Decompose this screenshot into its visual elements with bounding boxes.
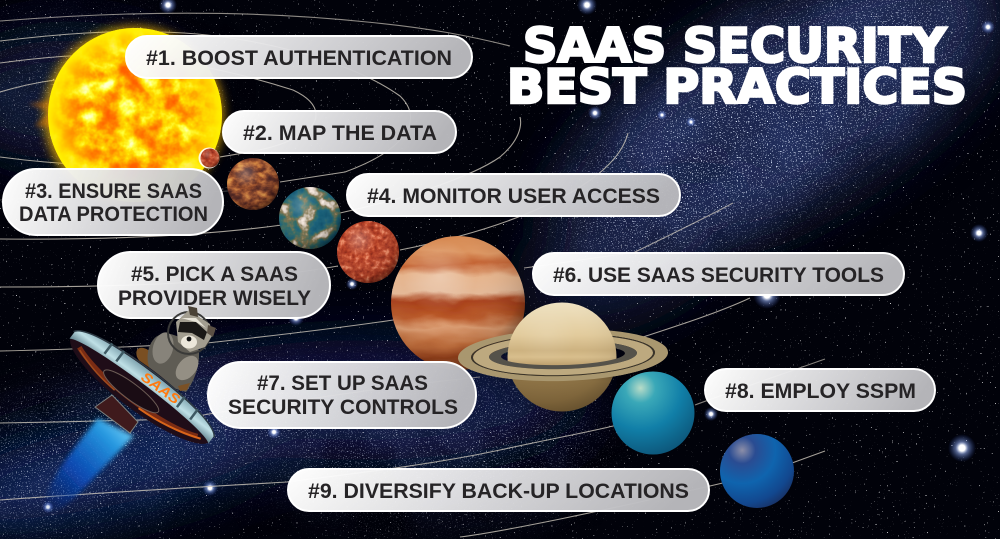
title — [507, 19, 967, 115]
icon: Venus — [227, 158, 279, 210]
icon: Saturn with rings — [457, 302, 669, 412]
rocket flame — [44, 418, 134, 513]
pill #4 — [347, 174, 680, 216]
icon: Earth — [279, 187, 341, 249]
title: BEST PRACTICES — [507, 60, 967, 115]
pill #7: SECURITY CONTROLS — [228, 395, 458, 419]
pill #7: #7. SET UP SAAS — [257, 371, 428, 395]
pill #5: #5. PICK A SAAS — [131, 262, 298, 286]
pill #7 — [208, 362, 476, 428]
pill #3: #3. ENSURE SAAS — [25, 179, 202, 203]
pill #3 — [3, 169, 223, 235]
pill #1 — [126, 36, 472, 78]
saucer hull — [57, 318, 224, 459]
pill #4: #4. MONITOR USER ACCESS — [367, 184, 660, 208]
title: SAAS SECURITY — [523, 19, 947, 74]
icon: Jupiter — [391, 236, 525, 370]
pill #8 — [705, 369, 935, 411]
pill #6: #6. USE SAAS SECURITY TOOLS — [553, 263, 884, 287]
pill #5: PROVIDER WISELY — [118, 286, 311, 310]
icon: Neptune — [720, 434, 794, 508]
pill #6 — [533, 253, 904, 295]
icon: raccoon astronaut on SaaS spaceship — [44, 306, 224, 513]
raccoon — [136, 306, 216, 392]
pill #1: #1. BOOST AUTHENTICATION — [146, 46, 452, 70]
icon: Uranus — [612, 372, 694, 454]
icon: sun — [28, 26, 224, 206]
SAAS logo: SAAS — [138, 368, 184, 408]
pill #2 — [223, 111, 456, 153]
pill #5 — [98, 252, 330, 318]
icon: Mercury — [198, 148, 220, 168]
pill #8: #8. EMPLOY SSPM — [725, 379, 916, 403]
icon: Mars — [337, 221, 399, 283]
thruster — [95, 395, 138, 433]
pill #9: #9. DIVERSIFY BACK-UP LOCATIONS — [308, 479, 689, 503]
pill #3: DATA PROTECTION — [19, 202, 208, 226]
pill #2: #2. MAP THE DATA — [243, 121, 437, 145]
pill #9 — [288, 469, 709, 511]
